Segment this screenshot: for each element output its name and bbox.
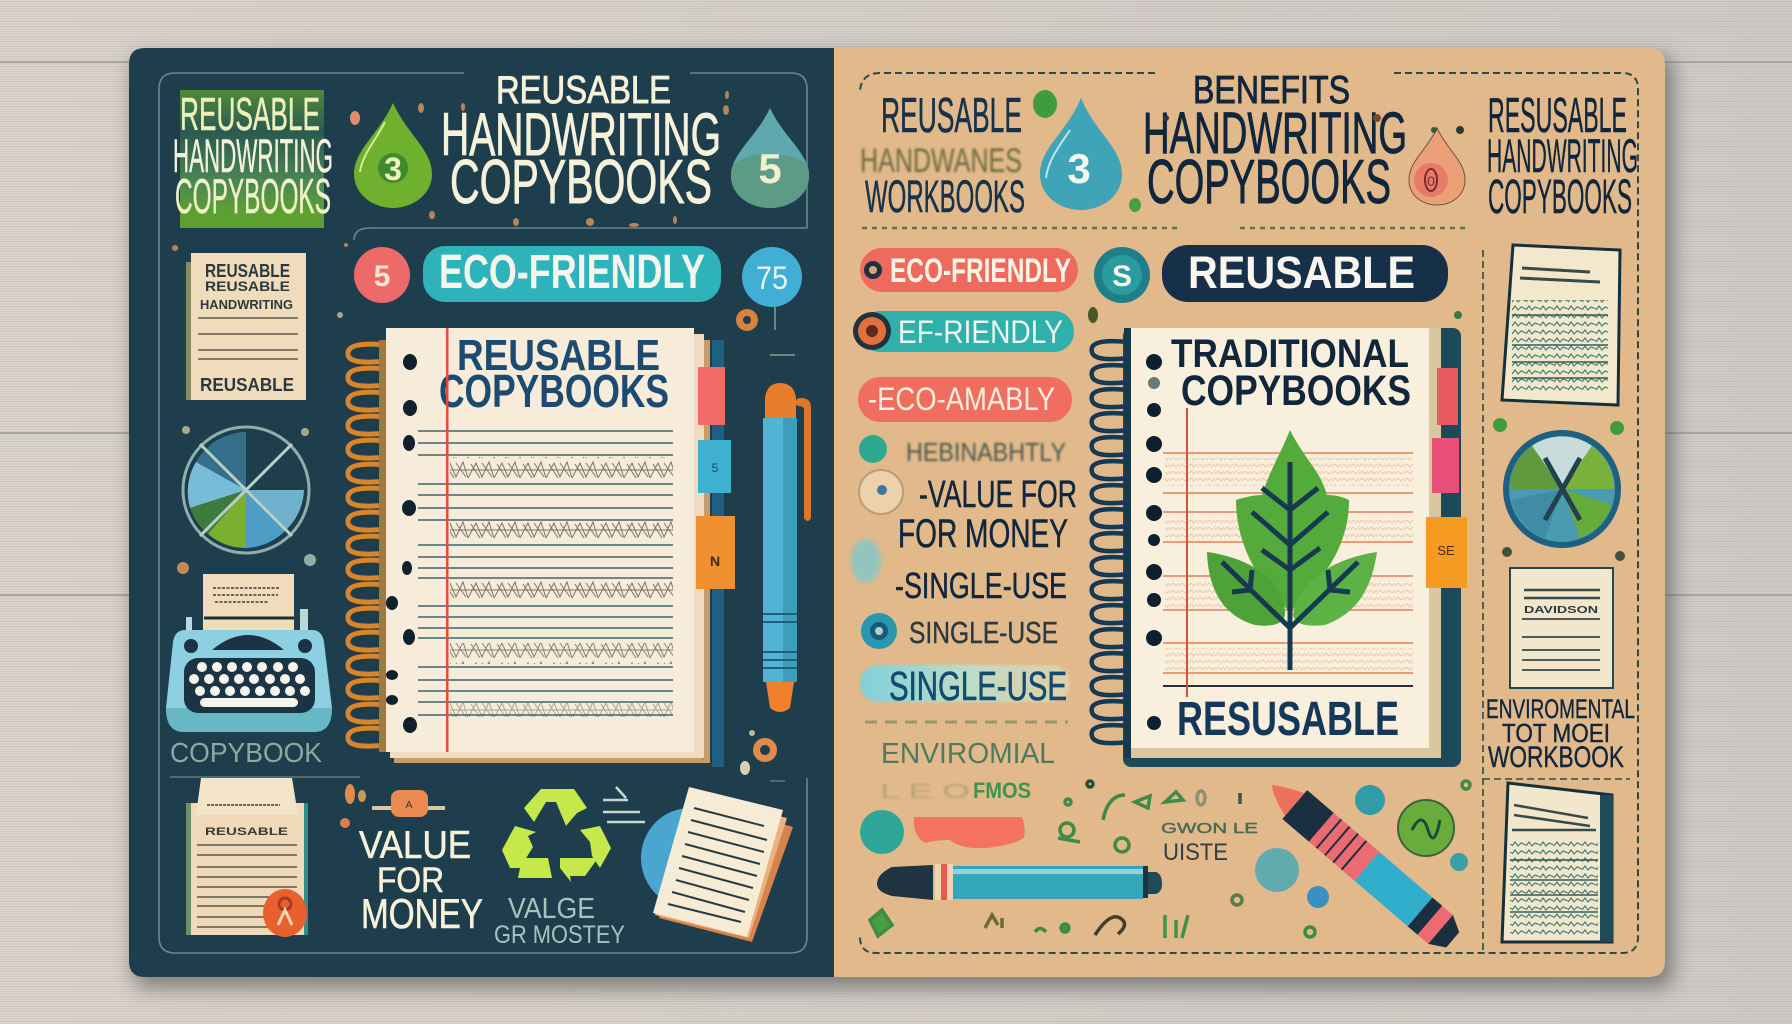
text: gwon le uiste: GWON LE: [1161, 820, 1258, 837]
title: benefits handwriting copybooks: COPYBOOKS: [1147, 148, 1391, 217]
notebook label: resusable: RESUSABLE: [1177, 693, 1399, 746]
title: reusable handwriting copybooks: [441, 69, 721, 217]
side heading: reusable handwaves workbooks: REUSABLE: [881, 89, 1022, 143]
decorative right specks: [740, 730, 777, 775]
icon: typewriter: [166, 574, 332, 732]
pill: single-use gradient: [860, 663, 1070, 709]
note card: reusable handwriting: REUSABLE: [205, 261, 290, 281]
green scribbles: [870, 781, 1470, 938]
icon: paper stack: [641, 787, 793, 942]
title: reusable handwriting copybooks: REUSABLE: [496, 69, 671, 112]
left frame: [159, 73, 807, 953]
notebook ruled lines: [1163, 408, 1413, 697]
note card: reusable handwriting: HANDWRITING: [200, 297, 293, 312]
note card: top right: [1502, 245, 1620, 405]
text: gwon le uiste: [1161, 820, 1258, 866]
note card: reusable handwriting: REUSABLE: [200, 375, 294, 395]
small dashes near recycle: [603, 787, 645, 822]
icon: blue drop 5: 5: [758, 145, 782, 192]
text: environmental workbook: [1486, 694, 1635, 774]
notebook tabs: 5: [712, 461, 719, 475]
panel: traditional copybooks (tan): COPYBOOKS: [1488, 171, 1632, 224]
notebook punched holes: [1146, 354, 1162, 730]
icon: diagonal marker pen: [1260, 771, 1465, 954]
pill: eco-friendly: ECO-FRIENDLY: [439, 246, 705, 299]
notebook tabs: SE: [1437, 543, 1455, 558]
notebook spiral rings: [1092, 328, 1131, 758]
icon: green leaf: [1207, 430, 1377, 670]
notebook heading: COPYBOOKS: [439, 365, 669, 417]
text: value for money: VALUE: [359, 824, 471, 867]
text: single-use: -SINGLE-USE: [895, 565, 1067, 606]
icon: recycle symbol: [502, 789, 611, 882]
notebook tabs: N: [710, 553, 720, 569]
label: copybook: COPYBOOK: [170, 737, 322, 768]
side heading: reusable handwaves workbooks: [860, 89, 1025, 222]
panel shadow: [133, 56, 1673, 988]
notebook heading: TRADITIONAL: [1171, 332, 1409, 376]
notebook punched holes: [386, 354, 417, 733]
side heading: reusable handwaves workbooks: HANDWANES: [860, 142, 1022, 180]
text: value for money: [359, 824, 483, 937]
side heading: reusable handwriting copybooks: COPYBOOKS: [175, 170, 331, 224]
text: environmal faded: [865, 722, 1068, 803]
text: environmental workbook: ENVIROMENTAL: [1486, 694, 1635, 724]
note card: bottom left: [186, 778, 308, 935]
badge: teal s: [1094, 247, 1150, 303]
icon: orange capsule connector: [340, 784, 445, 828]
notebook tabs: [1426, 368, 1467, 588]
badge: red 5: 5: [374, 260, 390, 293]
icon: salmon drop: 0: [1427, 173, 1435, 189]
icon: green drop 3: 3: [384, 151, 402, 187]
notebook heading: [1171, 332, 1411, 415]
panel: reusable copybooks (dark): [129, 48, 834, 977]
note card: reusable handwriting: [186, 253, 306, 400]
text: environmal faded: ENVIROMIAL: [881, 738, 1055, 770]
title: benefits handwriting copybooks: BENEFITS: [1193, 69, 1350, 112]
chart: pie wheel: [183, 427, 309, 553]
decorative green specks: [1088, 114, 1625, 561]
icon: green drop 3: [354, 103, 432, 208]
text: environmal faded: FMOS: [973, 778, 1031, 803]
notebook tabs: [696, 367, 735, 589]
side heading: resusable handwriting copybooks: RESUSABLE: [1488, 89, 1627, 143]
item: value for money: [859, 470, 1077, 556]
pill: ef-riendly teal: [853, 311, 1074, 352]
notebook spiral rings: [348, 340, 386, 752]
note card: reusable handwriting: REUSABLE: [205, 278, 290, 294]
item: value for money: FOR MONEY: [898, 512, 1068, 556]
item: single-use with target: [861, 613, 1058, 650]
icon: orange capsule connector: A: [406, 800, 413, 811]
text: environmal faded: L E O: [880, 781, 970, 803]
icon: blue pen: [763, 383, 811, 712]
icon: salmon drop: [1409, 128, 1465, 205]
note card: bottom left: REUSABLE: [205, 826, 288, 838]
notebook: traditional copybooks: [1092, 328, 1467, 767]
item: teal dot and red blur: [860, 810, 1025, 854]
icon: teal drop 3: [1040, 98, 1122, 210]
side heading: resusable handwriting copybooks: [1487, 89, 1638, 224]
badge: blue vs: [742, 247, 802, 307]
seal: orange badge: [263, 889, 307, 937]
text: valge gr mostey: [494, 893, 625, 949]
item: faded label: [859, 435, 1066, 467]
title: reusable handwriting copybooks: COPYBOOKS: [450, 148, 712, 217]
right frame: [860, 73, 1638, 953]
chart: globe wheel: [1506, 433, 1618, 545]
text: gwon le uiste: UISTE: [1163, 839, 1228, 866]
pill: ef-riendly teal: EF-RIENDLY: [898, 314, 1063, 350]
pill: eco-friendly red: ECO-FRIENDLY: [890, 252, 1071, 290]
item: faded label: HEBINABHTLY: [906, 437, 1066, 467]
icon: teal drop 3: 3: [1067, 145, 1091, 192]
notebook: reusable copybooks: [348, 328, 735, 767]
icon: horizontal teal pen: [877, 864, 1162, 900]
badge: teal s: S: [1112, 260, 1132, 293]
notebook heading: REUSABLE: [457, 331, 660, 380]
badge: red 5: [354, 247, 410, 303]
text: environmental workbook: WORKBOOK: [1488, 741, 1624, 774]
note card: middle right: [1510, 568, 1613, 688]
panel: reusable copybooks (dark): HANDWRITING: [173, 129, 333, 182]
decorative badges bottom: [1255, 785, 1468, 908]
icon: green dot: [1033, 90, 1057, 118]
title: reusable handwriting copybooks: HANDWRITING: [441, 101, 721, 168]
side heading: reusable handwriting copybooks: [173, 88, 333, 228]
panel: traditional copybooks (tan): [834, 48, 1665, 977]
pill: eco-friendly red: [860, 248, 1078, 292]
pill: eco-amably red: -ECO-AMABLY: [868, 381, 1055, 417]
note card: middle right: DAVIDSON: [1524, 605, 1598, 616]
notebook ruled lines: [418, 328, 673, 752]
icon: blue drop 5: [731, 108, 809, 208]
pill: reusable navy: REUSABLE: [1188, 247, 1415, 298]
title: benefits handwriting copybooks: [1143, 69, 1407, 217]
side heading: reusable handwriting copybooks: REUSABLE: [180, 88, 320, 140]
decorative specks top: [172, 91, 795, 574]
item: light blue blob: [851, 539, 881, 583]
notebook heading: COPYBOOKS: [1181, 367, 1411, 415]
pill: single-use gradient: SINGLE-USE: [889, 663, 1067, 709]
bottom divider: [170, 777, 785, 781]
item: single-use with target: SINGLE-USE: [909, 615, 1058, 650]
text: environmental workbook: TOT MOEI: [1502, 718, 1610, 748]
title: benefits handwriting copybooks: HANDWRITING: [1143, 101, 1407, 166]
note card: bottom right: [1502, 783, 1613, 942]
item: value for money: -VALUE FOR: [919, 474, 1077, 516]
side heading: reusable handwaves workbooks: WORKBOOKS: [865, 171, 1025, 222]
text: value for money: FOR: [377, 861, 444, 900]
text: value for money: MONEY: [361, 890, 483, 937]
text: valge gr mostey: VALGE: [508, 893, 595, 925]
badge: blue vs: 75: [756, 260, 788, 296]
text: valge gr mostey: GR MOSTEY: [494, 921, 625, 949]
notebook heading: [439, 331, 669, 417]
